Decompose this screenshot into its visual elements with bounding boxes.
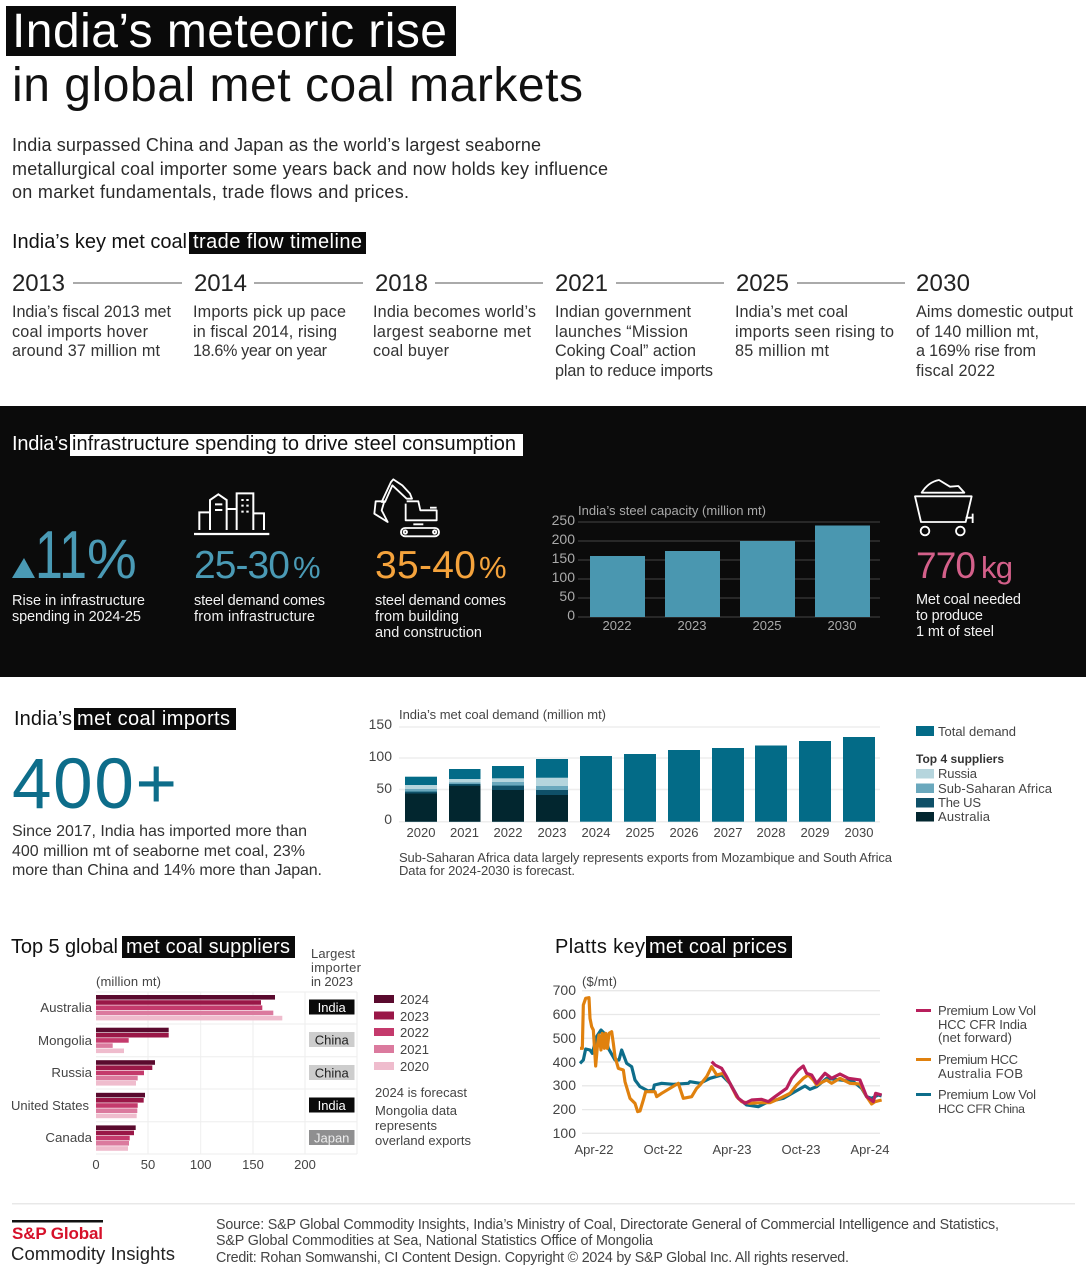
timeline item: 2013: India’s fiscal 2013 met [12,303,172,321]
chart: met coal prices [553,974,890,1157]
y axis labels: 150 [369,716,392,732]
legend: prices: HCC CFR India [938,1017,1028,1032]
y axis labels [552,512,575,623]
legend: suppliers: 2020 [400,1059,429,1074]
chart: top 5 suppliers [11,946,362,1172]
line: CFR China [580,1030,882,1107]
stat: 25-30% [194,544,325,625]
x axis labels: Apr-22 [574,1142,614,1157]
panel: infrastructure spending [0,406,1086,677]
heading: timeline: trade flow timeline [193,231,362,253]
heading: suppliers: met coal suppliers [126,936,290,958]
importer tags: India [318,1000,347,1015]
legend: prices: Premium HCC [938,1052,1018,1067]
chart: met coal prices: ($/mt) [582,974,617,989]
x axis labels: 2021 [450,825,479,840]
heading: infrastructure: infrastructure spending to drive steel consumption [72,433,516,455]
x axis labels [574,1142,890,1157]
timeline item: 2021: Indian government [555,303,692,321]
y axis labels: 0 [384,811,392,827]
y axis labels: 600 [553,1006,576,1022]
legend: met coal demand [916,724,1053,824]
timeline item: 2018 [373,270,536,360]
x axis labels: 2028 [757,825,785,840]
y axis labels: 500 [553,1030,576,1046]
heading: met coal imports: India’s [14,708,72,730]
x axis labels: 2026 [670,825,698,840]
timeline item: 2013: 2013 [12,270,65,297]
legend: met coal demand: Australia [938,809,991,824]
timeline item: 2025: 2025 [736,270,789,297]
stat: 11%: 11 [35,517,87,593]
stat: 25-30%: % [293,550,321,585]
chart notes: Data for 2024-2030 is forecast. [399,863,575,878]
y axis labels [369,716,392,827]
heading: timeline [12,231,366,254]
stat: 35-40%: 35-40 [375,544,476,587]
icon: city [194,493,269,534]
x axis labels: 2027 [714,825,742,840]
stat: 35-40%: % [479,550,507,585]
y axis labels: 50 [376,780,392,796]
x axis labels: 2025 [626,825,654,840]
timeline item: 2014: 2014 [194,270,247,297]
timeline item: 2018: 2018 [375,270,428,297]
timeline item: 2021 [555,270,713,380]
x axis labels: 2030 [845,825,873,840]
legend: suppliers: 2021 [400,1042,429,1057]
legend: prices: Australia FOB [938,1066,1023,1081]
stat: 11% [12,517,145,625]
stat: 770 kg: to produce [916,608,983,624]
stat: 770 kg [916,545,1021,640]
timeline item: 2030: 2030 [916,270,970,297]
legend: met coal demand: Top 4 suppliers [916,752,1004,766]
column title: largest importer: Largest [311,946,355,961]
stat: 400+: Since 2017, India has imported more than [12,823,307,840]
x axis labels [603,618,856,633]
country labels: Australia [40,1000,93,1015]
timeline item: 2018: India becomes world’s [373,303,536,321]
supplier notes: Mongolia data [375,1103,458,1118]
footer source text: S&P Global Commodities at Sea, National Statistics Office of Mongolia [216,1233,653,1249]
legend: prices: HCC CFR China [938,1102,1025,1116]
y axis labels: 400 [553,1054,576,1070]
logo: S&P Global Commodity Insights: Commodity Insights [11,1243,175,1264]
x axis labels: Oct-23 [781,1142,821,1157]
x axis labels: Apr-24 [850,1142,890,1157]
timeline item: 2021: 2021 [555,270,608,297]
title [6,5,583,112]
country labels [11,1000,93,1145]
timeline item: 2014: Imports pick up pace [193,303,346,321]
supplier notes: 2024 is forecast [375,1085,467,1100]
chart notes [399,850,893,878]
stat: 770 kg: kg [981,550,1013,585]
x axis labels: 2023 [678,618,706,633]
footer source text [12,1203,1075,1266]
logo: S&P Global Commodity Insights: S&P Global [12,1224,103,1243]
country labels: Mongolia [38,1033,93,1048]
heading: met coal imports: met coal imports [77,708,230,730]
footer source text: Credit: Rohan Somwanshi, CI Content Design. Copyright © 2024 by S&P Global Inc. All rights reserved. [216,1250,849,1266]
x axis labels [407,825,873,840]
supplier notes: overland exports [375,1133,472,1148]
timeline item: 2025: India’s met coal [735,303,848,321]
y axis labels: 250 [552,512,575,528]
x axis labels: Apr-23 [712,1142,752,1157]
bars 2021 [96,1011,273,1146]
timeline item: 2030: of 140 million mt, [916,323,1039,341]
heading: infrastructure: India’s [12,433,68,455]
stat: 35-40%: from building [375,609,459,625]
timeline item: 2030: fiscal 2022 [916,362,995,380]
line: Australia FOB [580,998,882,1112]
legend: met coal demand: Total demand [938,724,1016,739]
chart notes: Sub-Saharan Africa data largely represents exports from Mozambique and South Africa [399,850,893,865]
timeline item: 2013 [12,270,172,360]
stat: 770 kg: Met coal needed [916,592,1021,608]
x axis labels: 2022 [494,825,522,840]
intro text: India surpassed China and Japan as the world’s largest seaborne [12,135,541,155]
timeline item: 2025: 85 million mt [735,342,830,360]
y axis labels: 200 [553,1101,576,1117]
timeline item: 2014 [193,270,346,360]
y axis labels: 150 [552,550,575,566]
heading: timeline: India’s key met coal [12,231,187,253]
timeline [12,270,1074,380]
bars 2020 [96,1016,282,1151]
legend: suppliers: 2024 [400,992,429,1007]
stat: 25-30%: 25-30 [194,544,290,587]
x axis labels: 100 [190,1157,212,1172]
y axis labels: 300 [553,1077,576,1093]
supplier notes [375,1085,472,1148]
x axis labels: 2023 [538,825,566,840]
legend: prices [916,1003,1036,1116]
importer tags: China [315,1066,349,1080]
y axis labels: 100 [553,1125,576,1141]
logo: S&P Global Commodity Insights [11,1220,175,1264]
heading: prices [555,936,792,958]
stat: 25-30%: from infrastructure [194,609,315,625]
icon: excavator [374,479,439,536]
legend: met coal demand: The US [938,795,981,810]
x axis labels: 2024 [582,825,610,840]
timeline item: 2030: a 169% rise from [916,342,1036,360]
chart: steel capacity: India’s steel capacity (million mt) [578,503,766,518]
heading: suppliers: Top 5 global [11,936,118,958]
stat: 25-30%: steel demand comes [194,593,325,609]
importer tags: Japan [314,1130,349,1146]
timeline item: 2021: Coking Coal” action [555,342,696,360]
bars 2024 [96,995,275,1130]
timeline item: 2025: imports seen rising to [735,323,894,341]
timeline item: 2021: launches “Mission [555,323,688,341]
title: in global met coal markets [12,59,583,112]
stat: 11%: Rise in infrastructure [12,593,145,609]
x axis labels [92,1157,316,1172]
stat: 35-40%: and construction [375,625,482,641]
y axis labels [553,982,576,1141]
chart: top 5 suppliers: (million mt) [96,974,161,989]
stat: 11%: % [87,527,137,590]
supplier stacks [405,778,568,822]
y axis labels: 700 [553,982,576,998]
intro text: on market fundamentals, trade flows and prices. [12,182,409,202]
stat: 11%: spending in 2024-25 [12,609,141,625]
timeline item: 2013: around 37 million mt [12,342,160,360]
timeline item: 2018: largest seaborne met [373,323,532,341]
timeline item: 2014: in fiscal 2014, rising [193,323,337,341]
legend: met coal demand: Sub-Saharan Africa [938,781,1053,796]
supplier notes: represents [375,1118,438,1133]
total demand bars [405,737,875,822]
heading: suppliers [11,936,295,958]
y axis labels: 0 [567,607,575,623]
timeline item: 2021: plan to reduce imports [555,362,713,380]
timeline item: 2014: 18.6% year on year [193,342,328,360]
stat: 400+: 400 million mt of seaborne met coal, 23% [12,843,305,860]
icon: coal cart [915,480,973,535]
timeline item: 2025 [735,270,894,360]
footer source text: Source: S&P Global Commodity Insights, India’s Ministry of Coal, Directorate General of Commercial Intelligence and Statistics, [216,1217,999,1233]
stat: 400+: 400+ [12,745,177,824]
x axis labels: 0 [92,1157,100,1172]
x axis labels: 50 [141,1157,155,1172]
legend: prices: Premium Low Vol [938,1003,1036,1018]
y axis labels: 100 [552,569,575,585]
column title: largest importer: in 2023 [311,974,353,989]
x axis labels: 2025 [753,618,781,633]
x axis labels: 2020 [407,825,435,840]
stat: 770 kg: 1 mt of steel [916,624,994,640]
x axis labels: 2029 [801,825,829,840]
importer tags [309,1000,354,1146]
chart: met coal demand [369,707,893,878]
importer tags: India [318,1098,347,1113]
stat: 35-40% [375,544,507,641]
x axis labels: 2022 [603,618,631,633]
timeline item: 2018: coal buyer [373,342,450,360]
heading: prices: met coal prices [649,936,787,958]
column title: largest importer [311,946,362,989]
legend: met coal demand: Russia [938,766,978,781]
chart: met coal demand: India’s met coal demand (million mt) [399,707,606,722]
y axis labels: 100 [369,748,392,764]
timeline item: 2030 [916,270,1074,380]
title: India’s meteoric rise [12,5,447,58]
intro text [12,135,608,202]
y axis labels: 200 [552,531,575,547]
x axis labels: 200 [294,1157,316,1172]
heading: prices: Platts key [555,936,645,958]
bars 2022 [96,1005,262,1140]
country labels: Canada [45,1130,93,1145]
x axis labels: Oct-22 [643,1142,683,1157]
legend: suppliers: 2022 [400,1025,429,1040]
intro text: metallurgical coal importer some years back and now holds key influence [12,159,608,179]
x axis labels: 2030 [828,618,856,633]
chart: steel capacity [552,503,880,633]
legend: suppliers: 2023 [400,1009,429,1024]
timeline item: 2013: coal imports hover [12,323,149,341]
y axis labels: 50 [559,588,575,604]
heading: met coal imports [14,708,236,730]
stat: 400+: more than China and 14% more than Japan. [12,862,322,879]
country labels: United States [11,1098,89,1113]
bars 2023 [96,1000,261,1135]
legend: prices: (net forward) [938,1030,1012,1045]
importer tags: China [315,1032,349,1048]
legend: prices: Premium Low Vol [938,1087,1036,1102]
country labels: Russia [51,1065,93,1080]
timeline item: 2030: Aims domestic output [916,303,1074,321]
legend: suppliers [374,992,429,1074]
stat: 35-40%: steel demand comes [375,593,506,609]
stat: 400+ [12,745,322,879]
x axis labels: 150 [242,1157,264,1172]
line: CFR India [712,1062,882,1103]
stat: 770 kg: 770 [916,545,976,586]
bars [590,526,870,617]
column title: largest importer: importer [311,960,362,975]
